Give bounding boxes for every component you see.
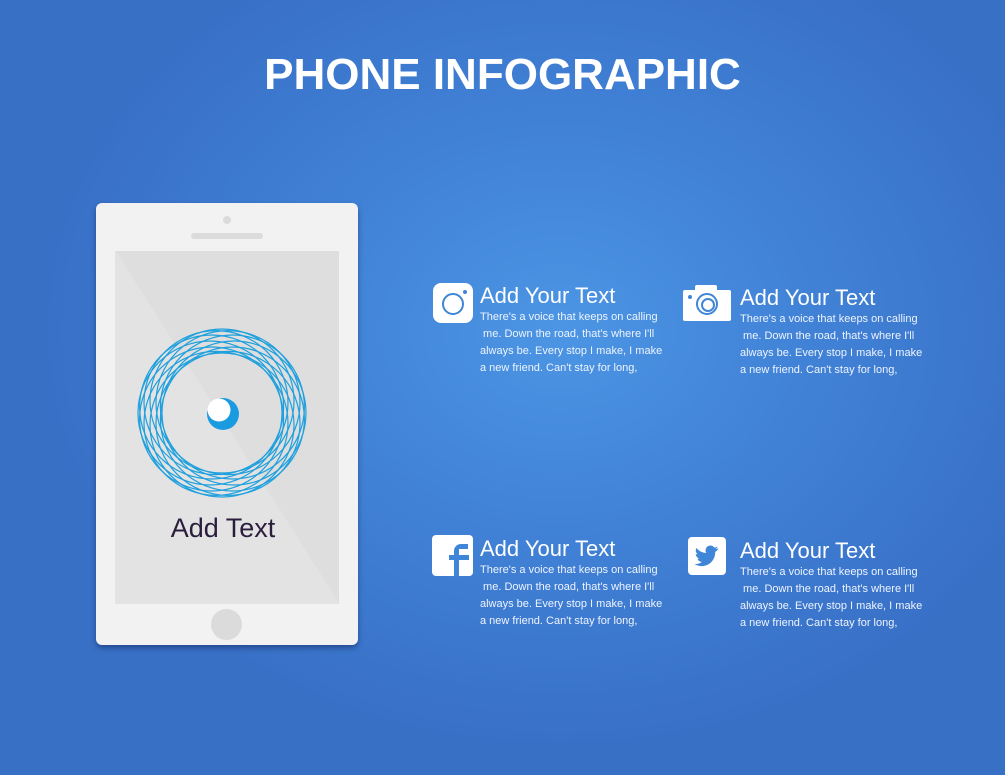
block: twitter <box>740 538 922 629</box>
block: facebook: There's a voice that keeps on calling me. Down the road, that's where I'll always be. Every stop I make, I make a new friend. Can't stay for long, <box>480 564 662 627</box>
block: twitter: Add Your Text <box>740 538 875 563</box>
icon: twitter <box>688 537 726 575</box>
screen text: Add Text <box>171 513 275 543</box>
block: facebook <box>480 536 662 627</box>
block: camera: Add Your Text <box>740 285 875 310</box>
icon: instagram <box>433 283 473 323</box>
home button <box>211 609 242 640</box>
speaker <box>191 233 263 239</box>
icon: camera <box>683 285 731 321</box>
phone <box>96 203 358 645</box>
block: twitter: There's a voice that keeps on calling me. Down the road, that's where I'll always be. Every stop I make, I make a new friend. Can't stay for long, <box>740 566 922 629</box>
icon: facebook <box>432 535 473 576</box>
block: instagram <box>480 283 662 374</box>
block: facebook: Add Your Text <box>480 536 615 561</box>
block: instagram: There's a voice that keeps on calling me. Down the road, that's where I'll always be. Every stop I make, I make a new friend. Can't stay for long, <box>480 311 662 374</box>
block: camera <box>740 285 922 376</box>
block: camera: There's a voice that keeps on calling me. Down the road, that's where I'll always be. Every stop I make, I make a new friend. Can't stay for long, <box>740 313 922 376</box>
block: instagram: Add Your Text <box>480 283 615 308</box>
screen <box>115 251 339 604</box>
title: PHONE INFOGRAPHIC <box>264 50 741 99</box>
camera dot <box>223 216 231 224</box>
icon: spirograph <box>137 328 307 498</box>
